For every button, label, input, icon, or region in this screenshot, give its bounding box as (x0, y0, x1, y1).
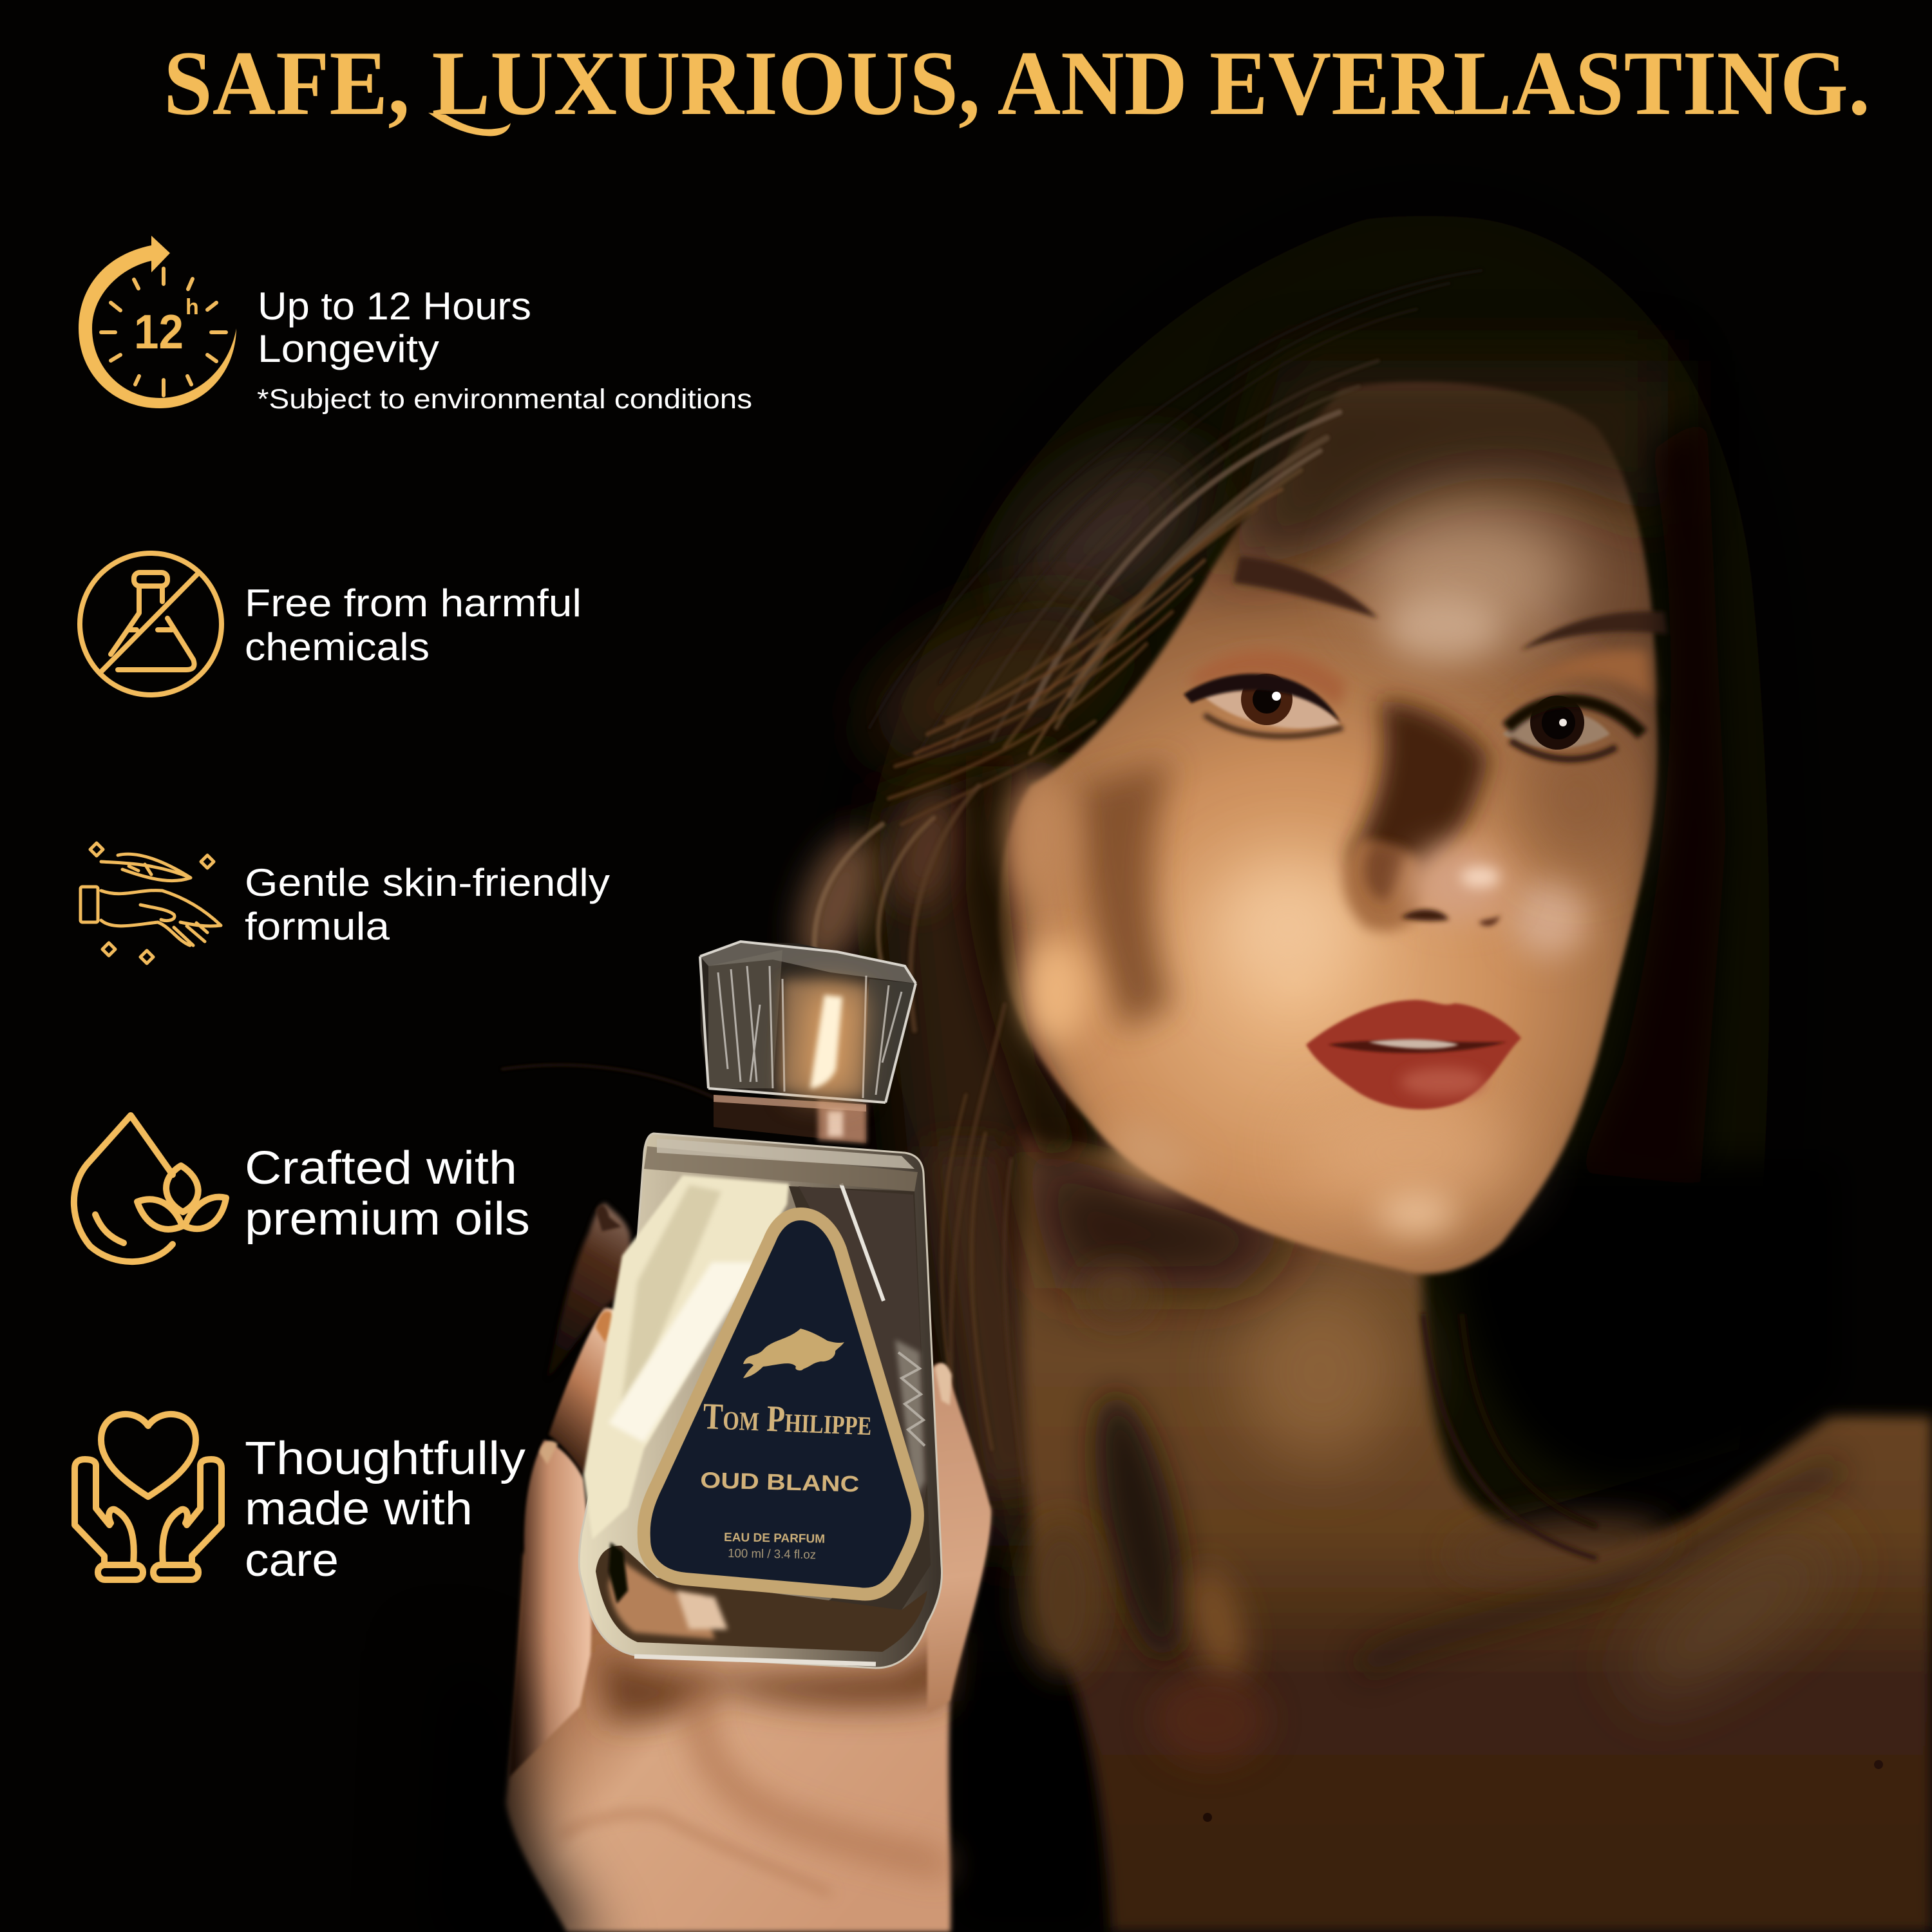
forehead light (1359, 509, 1578, 650)
thumb (927, 1363, 990, 1713)
text: made with care: made with (245, 1483, 473, 1535)
icon: 12 hour clock (79, 236, 236, 408)
icon: 12 hour clock: h (185, 295, 199, 319)
icon: oil drop with leaves (74, 1115, 226, 1262)
palm (506, 1507, 990, 1932)
label (644, 1214, 918, 1595)
left face shadow (966, 766, 1082, 1159)
finger: little (509, 1440, 591, 1777)
bull emblem (743, 1329, 844, 1378)
text: free from chemicals (245, 582, 582, 668)
nose tip (1407, 844, 1510, 921)
finger: middle (547, 1203, 634, 1378)
icon: crossed flask (80, 553, 222, 695)
collar (714, 1095, 866, 1143)
label: 100 ml / 3.4 fl.oz (728, 1547, 816, 1562)
text: made with care: Thoughtfully (245, 1433, 526, 1484)
icon: hands holding heart (75, 1414, 222, 1580)
photo: hand holding the bottle (425, 1203, 990, 1932)
text: skin friendly (245, 861, 610, 948)
hair mass (782, 214, 1770, 1932)
cream liquid reflection (583, 1175, 789, 1539)
cheek highlights (1217, 863, 1359, 992)
label: EAU DE PARFUM (724, 1531, 825, 1546)
feature: made with care (75, 1414, 526, 1586)
glass cap (700, 942, 916, 1103)
bottom reflection (596, 1546, 927, 1652)
title: SAFE, LUXURIOUS, AND EVERLASTING. (164, 32, 1870, 134)
label text: Tom Philippe (703, 1395, 873, 1443)
text: skin friendly: formula (245, 905, 390, 948)
palm left shadow (425, 1649, 596, 1932)
neck and chest (1018, 1133, 1932, 1932)
finger: ring (549, 1307, 630, 1475)
face (966, 361, 1668, 1274)
finger nails (596, 1205, 621, 1231)
forehead dimming (1224, 361, 1668, 580)
icon: hand with feather (80, 843, 221, 963)
palm crease (699, 1687, 947, 1868)
perfume bottle (579, 942, 942, 1668)
text: free from chemicals: Free from harmful (245, 582, 582, 625)
right side hair over face edge (1578, 412, 1726, 1185)
left eye (1184, 556, 1378, 736)
text: made with care (245, 1433, 526, 1586)
feature: longevity (79, 236, 752, 415)
nose shadow (1349, 701, 1489, 882)
feature: premium oils (74, 1115, 530, 1262)
text: premium oils: premium oils (245, 1193, 530, 1245)
right eye (1502, 611, 1668, 759)
text: longevity: Up to 12 Hours (258, 285, 531, 328)
hair strands (502, 270, 1481, 1481)
text: premium oils: Crafted with (245, 1142, 517, 1194)
text: skin friendly: Gentle skin-friendly (245, 861, 610, 904)
glass shoulder (644, 1146, 918, 1191)
text: premium oils (245, 1142, 530, 1245)
icon: 12 hour clock: 12 (134, 305, 184, 359)
nose wing (1343, 837, 1424, 931)
bottle glass body (579, 1133, 942, 1668)
text: made with care: care (245, 1535, 339, 1586)
text: longevity: *Subject to environmental conditions (257, 384, 752, 415)
lips (1306, 1000, 1521, 1110)
label: OUD BLANC (700, 1468, 860, 1497)
feature: free from chemicals (80, 553, 582, 695)
feature: skin friendly (80, 843, 610, 963)
text: longevity: Longevity (258, 327, 439, 370)
shadow under the bottle (599, 1629, 953, 1721)
text: longevity (257, 285, 752, 415)
dark glass right side (789, 1186, 931, 1610)
text: free from chemicals: chemicals (245, 625, 430, 668)
